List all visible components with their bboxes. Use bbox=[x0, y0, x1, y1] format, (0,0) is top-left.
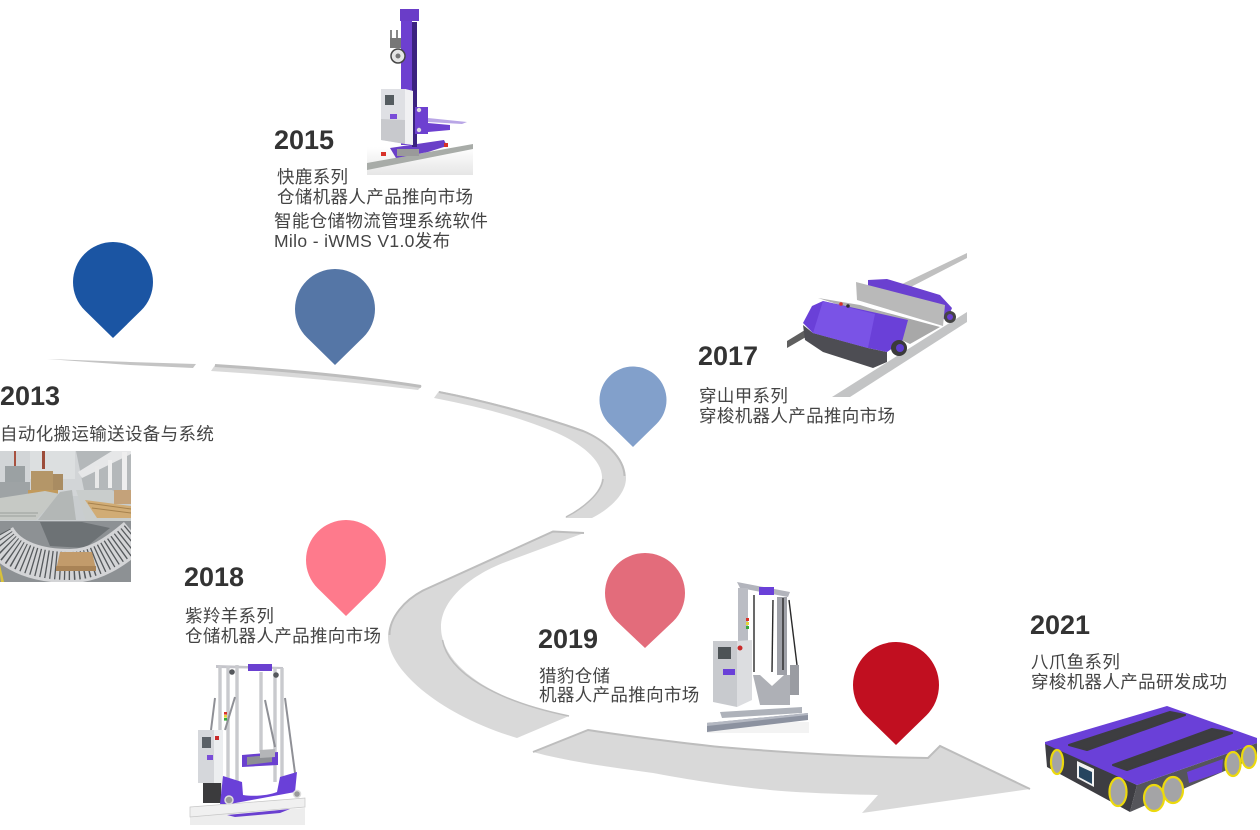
pin 2017 bbox=[600, 367, 666, 447]
year 2019: 2019 bbox=[538, 624, 598, 654]
robot image: 2017 穿山甲 bbox=[787, 253, 967, 397]
year 2013: 2013 bbox=[0, 381, 60, 411]
road: winding timeline path bbox=[47, 359, 1030, 813]
text block 2017 bbox=[698, 341, 895, 426]
robot image: 2021 八爪鱼 bbox=[1045, 706, 1257, 812]
year 2021: 2021 bbox=[1030, 610, 1090, 640]
description 2021 bbox=[1031, 652, 1227, 692]
description 2018: 仓储机器人产品推向市场 bbox=[185, 626, 381, 646]
year 2018: 2018 bbox=[184, 562, 244, 592]
description 2021: 八爪鱼系列 bbox=[1031, 652, 1120, 672]
description 2018: 紫羚羊系列 bbox=[185, 606, 274, 626]
text block 2021 bbox=[1030, 610, 1227, 692]
description 2017 bbox=[699, 386, 895, 426]
year 2017: 2017 bbox=[698, 341, 758, 371]
road segment 3 bbox=[434, 391, 626, 518]
text block 2013 bbox=[0, 381, 214, 444]
robot image: 2019 猎豹 bbox=[707, 582, 809, 733]
description 2015: 快鹿系列 bbox=[277, 167, 348, 187]
road segment 2 bbox=[211, 365, 422, 390]
road segment 4 bbox=[388, 531, 584, 738]
text block 2019 bbox=[538, 624, 700, 705]
image: conveyor warehouse photo bbox=[0, 451, 135, 582]
robot image: 2015 快鹿 bbox=[367, 9, 473, 175]
description 2019: 猎豹仓储 bbox=[539, 666, 610, 686]
description 2021: 穿梭机器人产品研发成功 bbox=[1031, 672, 1227, 692]
robot image: 2018 紫羚羊 bbox=[190, 664, 305, 825]
year 2015: 2015 bbox=[274, 125, 334, 155]
text block 2015 bbox=[274, 125, 488, 251]
pin 2013 bbox=[73, 242, 153, 338]
description 2019: 机器人产品推向市场 bbox=[539, 685, 700, 705]
description 2015 bbox=[274, 167, 488, 251]
description 2015: 仓储机器人产品推向市场 bbox=[277, 187, 473, 207]
description 2018 bbox=[185, 606, 381, 646]
pin 2018 bbox=[306, 520, 386, 616]
pin 2021 bbox=[853, 642, 939, 745]
description 2015: Milo - iWMS V1.0发布 bbox=[274, 231, 450, 251]
description 2017: 穿山甲系列 bbox=[699, 386, 788, 406]
description 2019 bbox=[539, 666, 700, 705]
description 2015: 智能仓储物流管理系统软件 bbox=[274, 211, 488, 231]
description 2017: 穿梭机器人产品推向市场 bbox=[699, 406, 895, 426]
pin 2015 bbox=[295, 269, 375, 365]
road segment 1 bbox=[47, 359, 196, 368]
road segment 5: arrow head bbox=[533, 730, 1030, 813]
description 2013: 自动化搬运输送设备与系统 bbox=[0, 424, 214, 444]
text block 2018 bbox=[184, 562, 381, 646]
pin 2019 bbox=[605, 553, 685, 648]
